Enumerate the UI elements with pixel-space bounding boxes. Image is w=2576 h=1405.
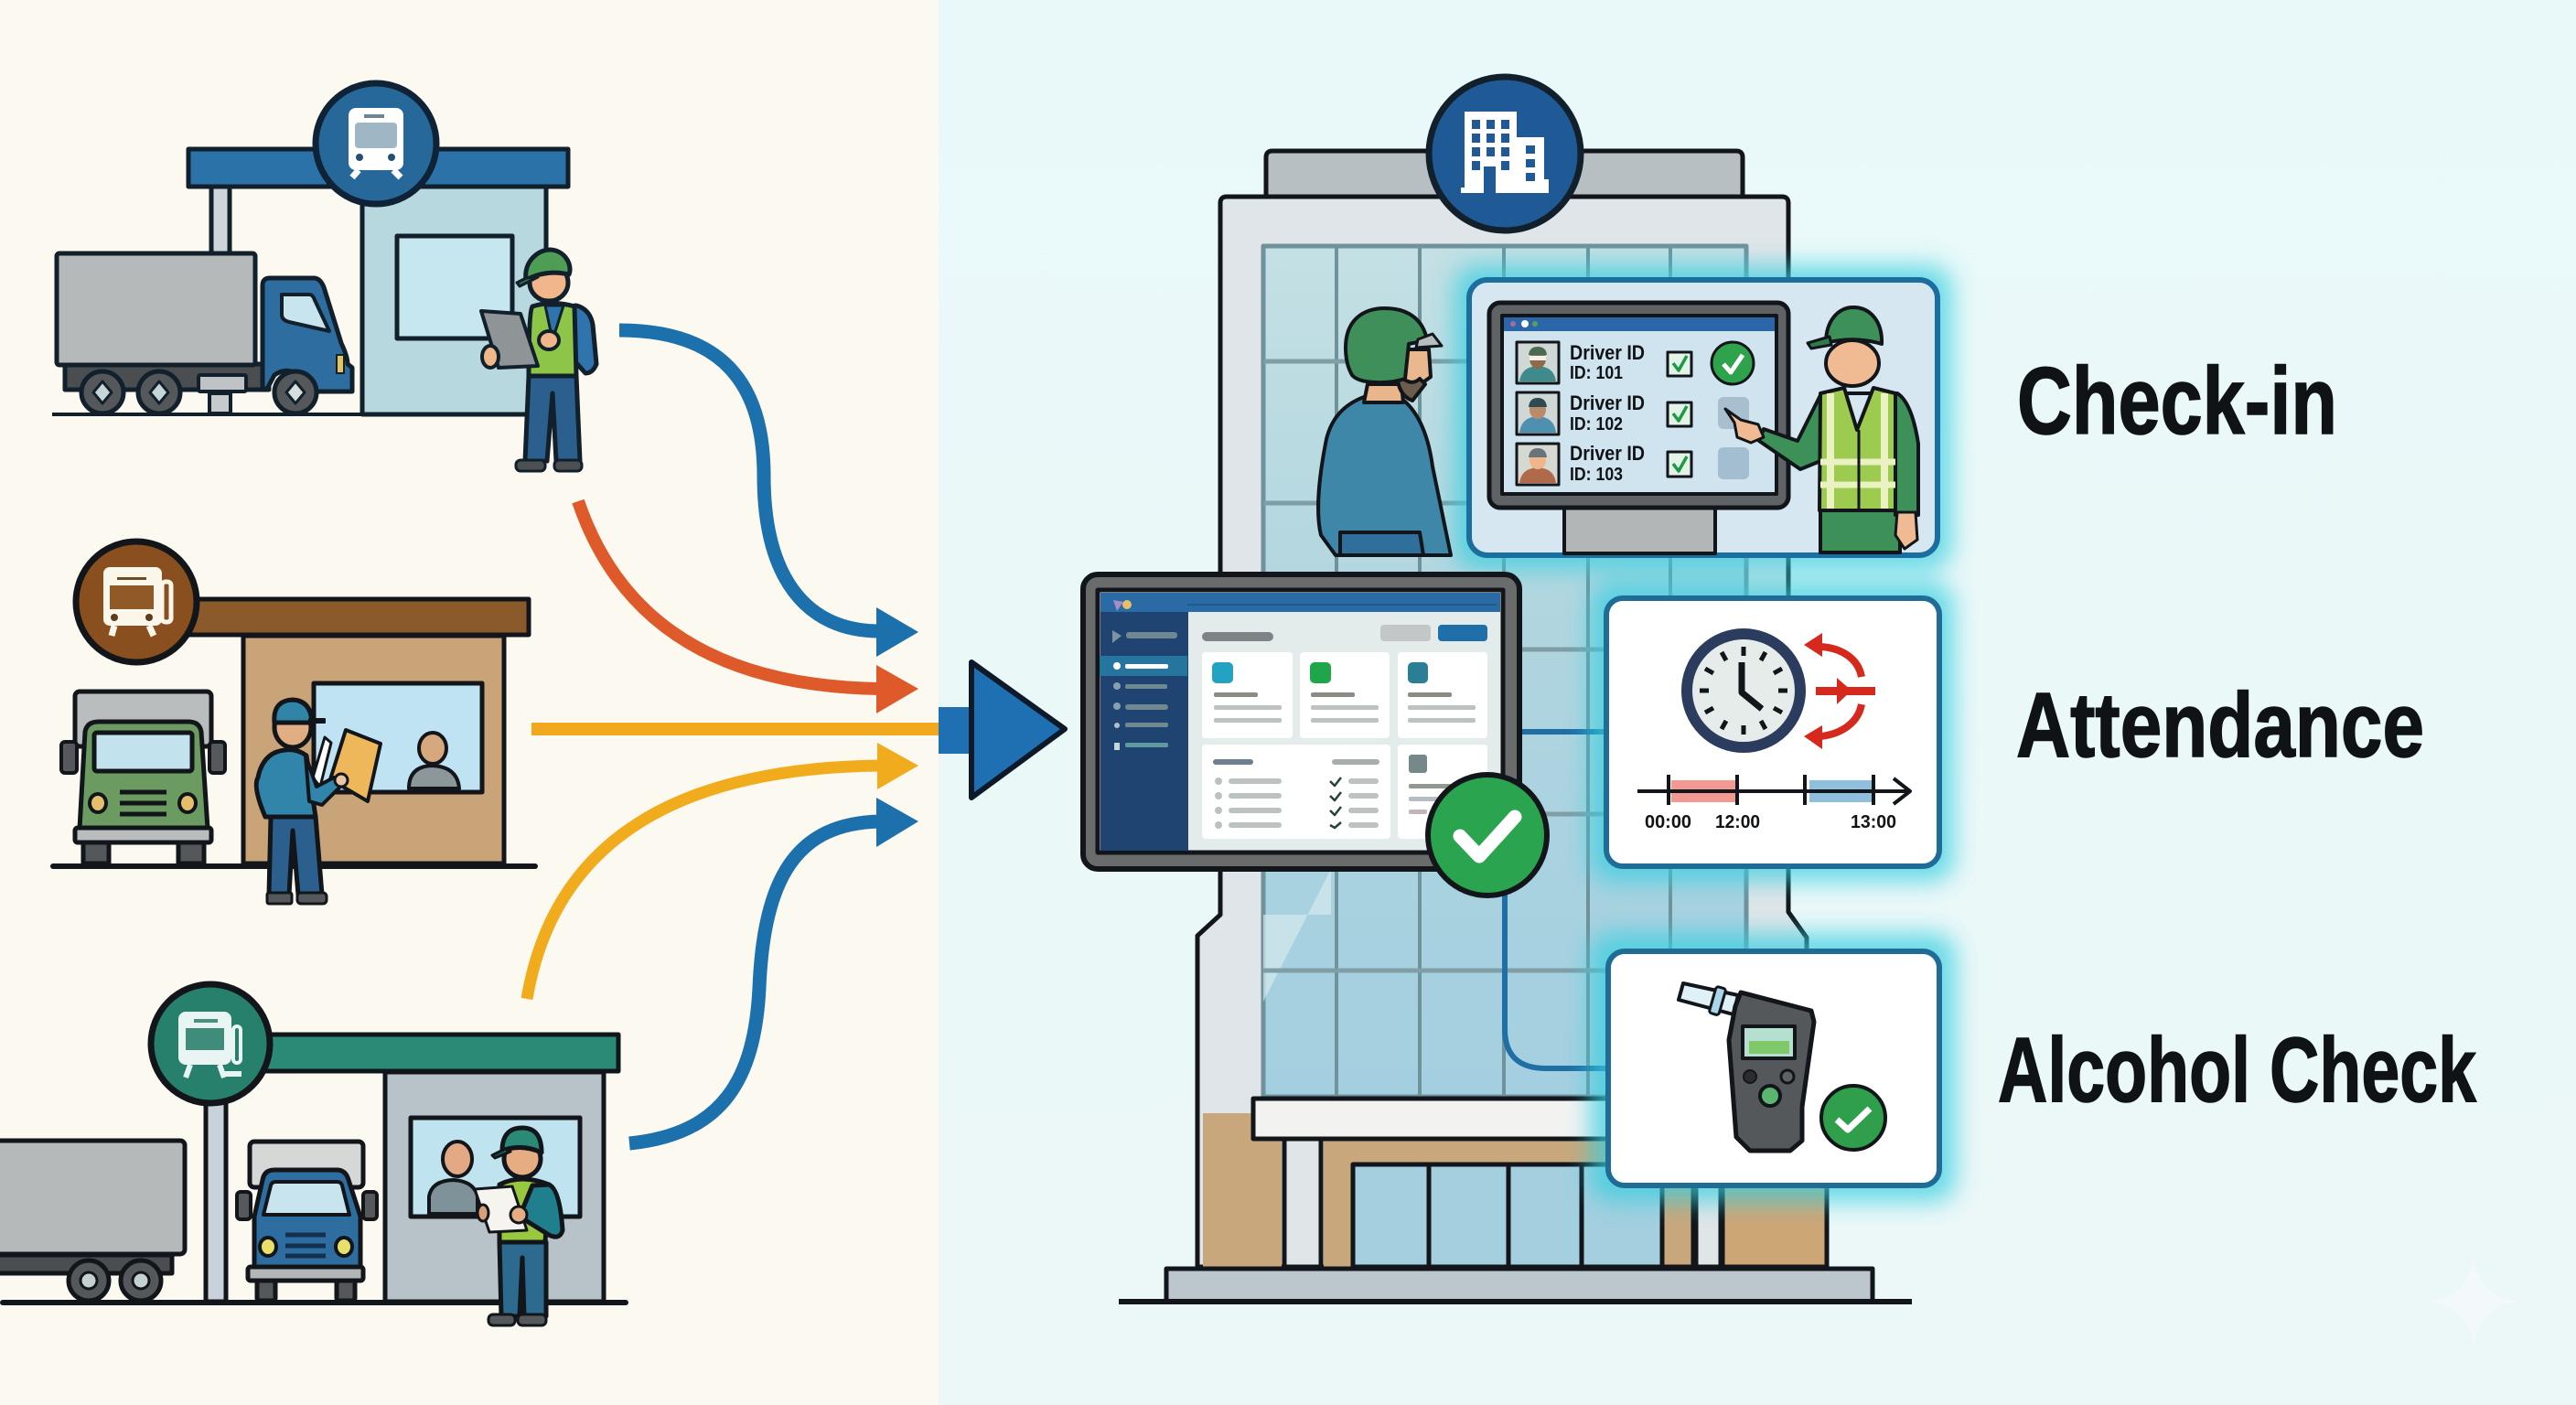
label: Attendance: Attendance [2016, 674, 2424, 777]
row: driver 102: ID: 102 [1570, 414, 1623, 434]
side panel [1398, 745, 1487, 839]
worker with paper [256, 700, 381, 904]
arrow: blue top [619, 330, 918, 657]
arrow: blue bottom [629, 798, 918, 1143]
green truck front [61, 692, 225, 863]
check-in monitor [1489, 303, 1788, 508]
arrow: orange [578, 501, 918, 713]
icon: bus badge [76, 542, 197, 662]
connector: monitor to attendance [1519, 729, 1610, 735]
row: driver 102: Driver ID [1570, 391, 1645, 414]
icon: bus badge [151, 984, 270, 1103]
panel: central dashboard monitor [1083, 574, 1547, 896]
icon: train badge [316, 83, 436, 204]
arrow: large convergence [939, 662, 1065, 798]
row: driver 103 [1517, 442, 1749, 485]
ground line [0, 1300, 628, 1305]
booth window [411, 1118, 580, 1217]
booth [362, 187, 546, 414]
icon: red rotation arrows [1804, 633, 1875, 749]
driver in helmet [1318, 308, 1451, 555]
clerk in window [409, 733, 459, 788]
panel: teal depot [0, 984, 628, 1325]
timeline: 00:00 [1645, 812, 1691, 832]
panel: brown depot [50, 542, 538, 904]
ground line [1119, 1299, 1912, 1304]
ground line [50, 863, 538, 869]
roof [265, 1035, 618, 1071]
card glow [1454, 265, 1956, 1202]
row: driver 102 [1517, 391, 1749, 434]
entrance canopy [1253, 1099, 1619, 1139]
summary cards [1202, 652, 1487, 738]
icon: sparkle watermark [2430, 1258, 2517, 1346]
panel: blue depot [52, 83, 596, 471]
connector: monitor to alcohol check [1505, 869, 1610, 1068]
card frame [1608, 951, 1939, 1185]
trailer truck [0, 1141, 185, 1301]
booth [385, 1072, 604, 1302]
row: driver 103: Driver ID [1570, 442, 1645, 465]
parapet [1266, 151, 1743, 197]
row: driver 101 [1517, 341, 1754, 384]
row: driver 103: ID: 103 [1570, 465, 1623, 485]
icon: green check [1821, 1086, 1885, 1150]
monitor bezel [1083, 574, 1519, 869]
worker with tablet [481, 250, 596, 471]
dashboard sidebar [1100, 593, 1500, 851]
sign pole [206, 1102, 226, 1302]
timeline: 12:00 [1715, 812, 1760, 832]
monitor stand [1564, 508, 1715, 553]
canopy pillar [211, 187, 230, 254]
label: Check-in: Check-in [2017, 349, 2337, 455]
clerk in window [429, 1142, 478, 1214]
timeline [1637, 775, 1910, 832]
roof [188, 599, 529, 635]
attendant in safety vest [1725, 307, 1918, 552]
row: driver 101: ID: 101 [1570, 363, 1623, 383]
checklist panel [1202, 745, 1390, 839]
arrow: yellow curved [527, 743, 918, 999]
box truck [57, 253, 352, 413]
icon: building badge [1429, 77, 1581, 231]
icon: large green check [1428, 775, 1547, 896]
glass curtain wall [1263, 246, 1746, 1097]
panel: office building [1119, 151, 1912, 1304]
icon: clock [1687, 634, 1800, 747]
ground floor [1203, 1113, 1827, 1267]
blue truck front [237, 1142, 377, 1301]
screen [1098, 590, 1503, 853]
booth [243, 636, 504, 863]
icon: breathalyzer [1679, 983, 1814, 1151]
card frame [1469, 280, 1937, 555]
panel: check-in card [1318, 280, 1937, 555]
timeline: 13:00 [1851, 812, 1896, 832]
worker with clipboard [475, 1128, 563, 1325]
card frame [1606, 598, 1939, 866]
roof [188, 149, 568, 187]
booth window [397, 236, 512, 338]
panel: right background [939, 0, 2576, 1405]
plinth [1166, 1269, 1873, 1302]
panel: alcohol check card [1608, 951, 1939, 1185]
panel: left background [0, 0, 939, 1405]
arrow: yellow straight [531, 723, 939, 735]
building body [1197, 197, 1827, 1267]
booth window [314, 683, 482, 792]
ground line [52, 413, 532, 416]
panel: attendance card [1606, 598, 1939, 866]
row: driver 101: Driver ID [1570, 341, 1645, 364]
dashboard header [1202, 625, 1487, 641]
